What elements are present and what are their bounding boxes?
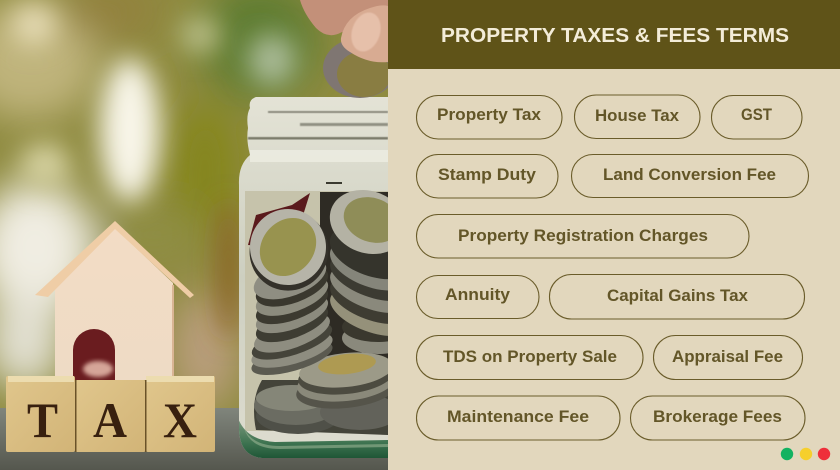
house door — [73, 329, 115, 380]
pill: Maintenance Fee — [416, 396, 620, 440]
falling coin — [323, 42, 388, 98]
pill: Appraisal Fee — [654, 336, 802, 380]
header band — [388, 0, 840, 69]
stack of coins: right — [330, 190, 388, 354]
pill: Maintenance Fee: Maintenance Fee — [447, 408, 589, 426]
pill: Brokerage Fees: Brokerage Fees — [653, 408, 782, 426]
jar green base — [239, 420, 388, 458]
block letter A: A — [93, 392, 127, 448]
pill: Property Tax — [416, 96, 562, 139]
block letter T: T — [27, 392, 58, 448]
pill: Annuity: Annuity — [445, 286, 511, 304]
pill: House Tax: House Tax — [595, 107, 680, 125]
block letter X: X — [163, 392, 197, 448]
pill: Annuity — [416, 276, 539, 318]
pill: TDS on Property Sale: TDS on Property Sale — [443, 348, 617, 366]
glass jar — [236, 95, 388, 460]
pill: Stamp Duty: Stamp Duty — [438, 166, 537, 184]
pill: House Tax — [574, 95, 700, 138]
house roof — [35, 221, 194, 298]
table top — [0, 408, 388, 470]
pill: Capital Gains Tax — [550, 274, 804, 319]
status dots — [781, 448, 830, 460]
hand holding coin — [300, 0, 388, 62]
wooden TAX blocks — [6, 376, 215, 452]
photo: hand, jar of coins and wooden house — [0, 0, 422, 470]
pill: Property Registration Charges: Property Registration Charges — [458, 227, 708, 245]
blurred garden background — [0, 0, 388, 410]
pill: Property Tax: Property Tax — [437, 106, 542, 124]
pill: TDS on Property Sale — [416, 336, 643, 380]
icon: wooden house — [35, 221, 194, 380]
pill: Brokerage Fees — [630, 396, 805, 440]
pill: Stamp Duty — [416, 154, 558, 198]
pill: Land Conversion Fee — [572, 154, 808, 198]
stack of coins: left — [250, 209, 332, 375]
stack of coins: lower — [254, 352, 388, 434]
pill: Capital Gains Tax: Capital Gains Tax — [607, 287, 749, 305]
pill: Appraisal Fee: Appraisal Fee — [672, 348, 783, 366]
pill: Land Conversion Fee: Land Conversion Fee — [603, 166, 776, 184]
pill: GST: GST — [741, 106, 772, 124]
panel: terms background — [388, 69, 840, 470]
title: PROPERTY TAXES & FEES TERMS — [441, 24, 789, 47]
pill: GST — [712, 96, 802, 139]
pill: Property Registration Charges — [416, 214, 749, 258]
